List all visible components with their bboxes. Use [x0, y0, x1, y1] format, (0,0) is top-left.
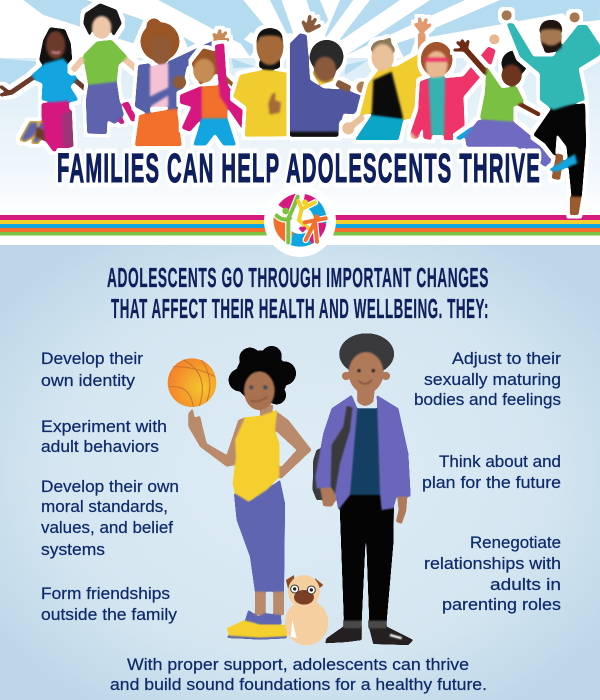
text: future: Think about and	[439, 453, 561, 471]
icon: basketball	[168, 358, 216, 407]
center illustration	[168, 333, 413, 645]
text: adult behaviors: Experiment with	[41, 418, 167, 436]
group of jumping people, left half	[0, 3, 298, 152]
text: adult behaviors: adult behaviors	[41, 438, 159, 456]
text: moral standards: values, and belief	[41, 519, 173, 537]
person: woman with curly hair and orange skirt	[135, 19, 229, 146]
text: moral standards: moral standards,	[41, 498, 168, 516]
person: boy in green tee	[453, 39, 555, 167]
person: girl in blue top	[0, 27, 87, 152]
text: moral standards: Develop their own	[41, 478, 179, 496]
text: moral standards: systems	[41, 541, 105, 559]
text: future: plan for the future	[422, 474, 561, 492]
figure: pug dog	[285, 575, 328, 645]
person: man in purple sweater with afro	[290, 15, 373, 137]
closing statement: and build sound foundations for a healthy future.	[110, 676, 487, 694]
group of jumping people, right half	[290, 10, 600, 215]
closing statement	[110, 656, 487, 694]
text: identity: Develop their	[41, 350, 144, 368]
text: relationships: parenting roles	[442, 596, 561, 614]
subheading	[107, 262, 489, 324]
text: maturing bodies: bodies and feelings	[414, 391, 561, 409]
text: relationships: Renegotiate	[470, 534, 561, 552]
person: woman with pink glasses and pink jacket	[410, 34, 499, 140]
right list of changes	[414, 350, 562, 614]
header background with sun rays	[0, 0, 600, 245]
lower panel background	[0, 245, 600, 700]
text: identity: own identity	[41, 372, 136, 390]
text: maturing bodies: Adjust to their	[452, 350, 562, 368]
person: man in yellow sweater with thumb up	[233, 28, 298, 137]
closing statement: With proper support, adolescents can thrive	[127, 656, 469, 674]
person: laughing girl in pink jacket	[180, 43, 251, 145]
logo: circle of colourful figures	[264, 185, 336, 257]
text: relationships: relationships with	[424, 555, 561, 573]
text: friendships: Form friendships	[41, 585, 170, 603]
text: friendships: outside the family	[41, 606, 178, 624]
person: blond man in yellow jacket	[342, 17, 431, 140]
person: woman in green tee	[73, 3, 138, 134]
person: man in teal sweater	[502, 10, 600, 215]
rainbow stripes	[0, 215, 600, 236]
text: maturing bodies: sexually maturing	[424, 371, 561, 389]
figure: boy in purple shirt with black pants	[313, 333, 413, 645]
figure: girl in yellow top	[188, 346, 312, 639]
left list of changes	[41, 350, 179, 624]
text: relationships: adults in	[490, 576, 561, 594]
